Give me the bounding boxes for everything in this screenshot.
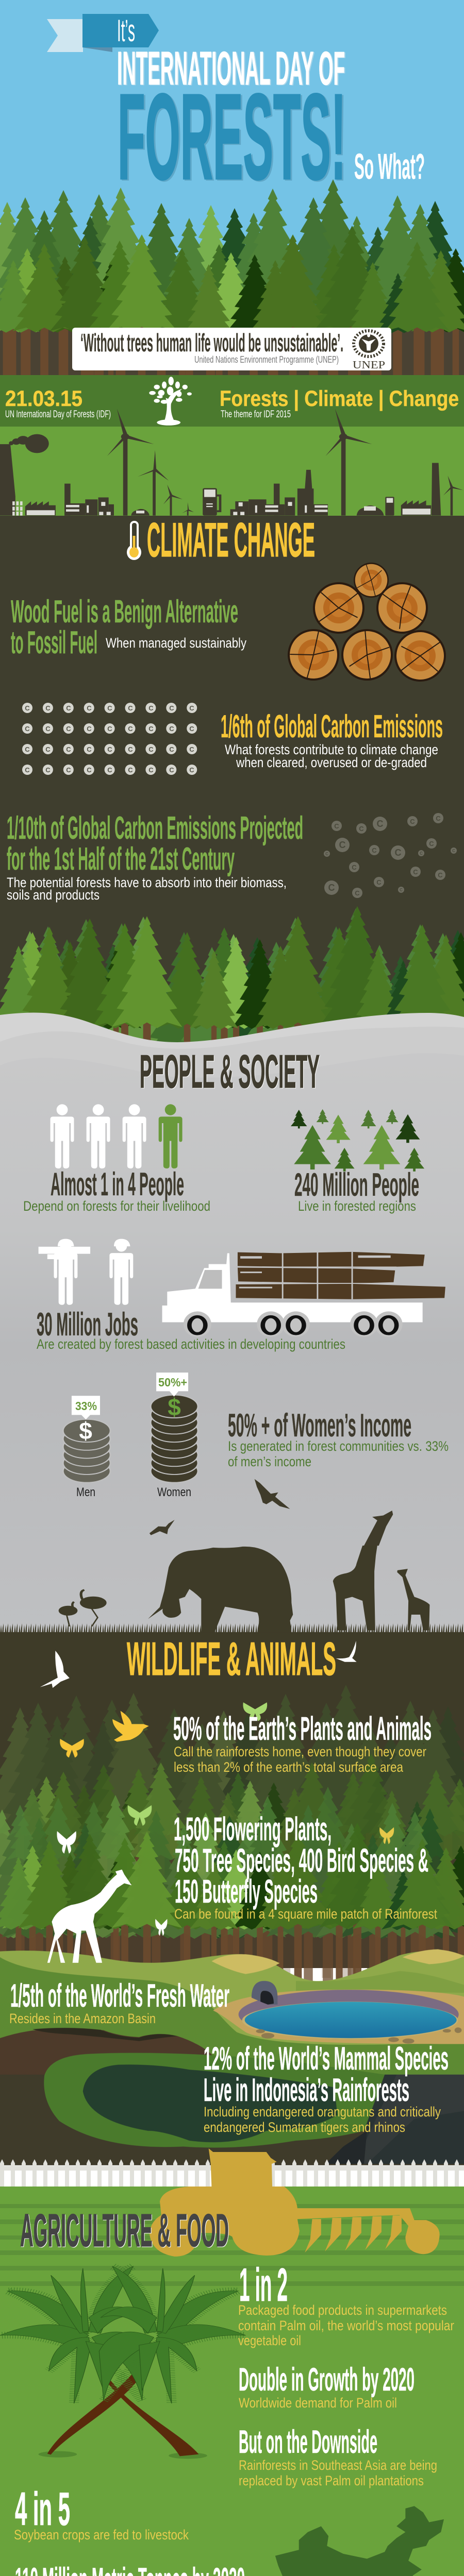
icon: UNEP logo: UNEP bbox=[353, 359, 385, 371]
icon: forestry workers bbox=[39, 1239, 133, 1305]
text: wood fuel: When managed sustainably bbox=[106, 635, 246, 651]
chart: income coin stacks: 33% bbox=[75, 1399, 97, 1413]
panel: agriculture field bbox=[0, 2187, 464, 2576]
text: 30 million jobs: Are created by forest based activities in developing countries bbox=[37, 1336, 345, 1352]
icon: birds and butterflies bbox=[40, 1641, 394, 1936]
panel: quote card: United Nations Environment Programme (UNEP) bbox=[194, 354, 339, 365]
heading: Climate Change bbox=[127, 513, 315, 567]
icon: stacked logs bbox=[278, 563, 453, 690]
text: one in four bbox=[23, 1166, 210, 1214]
text: 30 million jobs: 30 Million Jobs bbox=[37, 1307, 138, 1343]
panel: date and theme band bbox=[0, 375, 464, 427]
text: soybean stats: Soybean crops are fed to livestock bbox=[14, 2527, 189, 2543]
icon: scattered carbon coins: CCCCCCCCCCC bbox=[334, 815, 443, 897]
panel: climate section ground bbox=[0, 516, 464, 1031]
icon: scattered carbon coins: CCCC bbox=[328, 819, 401, 893]
text: wood fuel: to Fossil Fuel bbox=[11, 625, 97, 660]
panel: date and theme band: The theme for IDF 2015 bbox=[221, 409, 291, 420]
text: 240 million: Live in forested regions bbox=[298, 1198, 416, 1214]
text: one in four: Depend on forests for their livelihood bbox=[23, 1198, 210, 1214]
panel: forest floor bbox=[0, 278, 464, 376]
illustration: picket fence bbox=[0, 2159, 464, 2187]
text: one tenth of carbon: soils and products bbox=[7, 887, 100, 903]
icon: small tree cluster bbox=[291, 1109, 424, 1172]
panel: date and theme band: UN International Day of Forests (IDF) bbox=[5, 409, 111, 420]
ribbon: It's: It’s bbox=[117, 13, 135, 48]
icon: soaring birds bbox=[150, 1479, 393, 1546]
text: mammal species bbox=[204, 2041, 449, 2135]
forest: second tree line bbox=[0, 906, 464, 1219]
icon: white tree bbox=[149, 377, 192, 426]
text: 30 million jobs bbox=[37, 1307, 345, 1352]
panel: quote card bbox=[72, 328, 391, 371]
text: one sixth of carbon bbox=[221, 709, 443, 770]
text: soybean stats bbox=[14, 2483, 421, 2576]
panel: date and theme band: 21.03.15 bbox=[5, 386, 82, 411]
panel: people and society snow hills bbox=[0, 1013, 464, 1638]
text: fresh water: Resides in the Amazon Basin bbox=[9, 2011, 156, 2026]
illustration: savannah animals bbox=[59, 1546, 429, 1632]
chart: income coin stacks: $ bbox=[168, 1394, 181, 1420]
icon: four people bbox=[51, 1104, 183, 1168]
text: soybean stats: 4 in 5 bbox=[15, 2483, 70, 2535]
text: palm oil stats bbox=[238, 2259, 454, 2488]
panel: wildlife section ground bbox=[0, 1632, 464, 1967]
text: 240 million bbox=[294, 1167, 419, 1214]
chart: income coin stacks bbox=[63, 1372, 198, 1499]
text: one sixth of carbon: when cleared, overused or de-graded bbox=[236, 755, 427, 770]
icon: logging truck bbox=[162, 1252, 445, 1337]
text: women's income: of men’s income bbox=[228, 1454, 311, 1469]
text: one in four: Almost 1 in 4 People bbox=[51, 1166, 184, 1202]
chart: income coin stacks: Women bbox=[157, 1485, 191, 1499]
text: palm oil stats: Worldwide demand for Palm oil bbox=[239, 2395, 397, 2411]
text: palm oil stats: vegetable oil bbox=[238, 2333, 301, 2348]
chart: carbon coin grid, 36 of 216 bbox=[25, 704, 198, 774]
icon: UNEP logo bbox=[353, 331, 385, 371]
icon: map of China bbox=[275, 2506, 444, 2576]
icon: scattered carbon coins: CCCC bbox=[325, 849, 455, 892]
icon: thermometer bbox=[127, 521, 141, 560]
icon: white giraffe bbox=[47, 1870, 131, 1963]
chart: income coin stacks: $ bbox=[79, 1417, 92, 1444]
text: flowering plants bbox=[174, 1810, 437, 1922]
illustration: industry and wind turbine skyline bbox=[0, 409, 463, 516]
text: mammal species: endangered Sumatran tigers and rhinos bbox=[204, 2120, 405, 2135]
forest: top tree line bbox=[0, 179, 464, 490]
text: palm oil stats: 1 in 2 bbox=[239, 2259, 288, 2311]
chart: carbon coin grid, 36 of 216: CCCCCCCCC bbox=[25, 704, 194, 712]
ribbon: It's bbox=[47, 13, 159, 52]
chart: income coin stacks: Men bbox=[76, 1485, 95, 1499]
text: palm oil stats: replaced by vast Palm oil plantations bbox=[239, 2473, 424, 2488]
panel: bright green skyline sky bbox=[0, 427, 464, 516]
chart: carbon coin grid, 36 of 216: CCCCCCCCC bbox=[25, 745, 194, 753]
text: one tenth of carbon: The potential forests have to absorb into their biomass, bbox=[7, 875, 287, 890]
panel: green hills and pond bbox=[0, 1950, 464, 2165]
illustration: cliff bbox=[0, 2029, 237, 2075]
illustration: palm trees bbox=[0, 2266, 245, 2459]
illustration: grass edge bbox=[0, 1623, 464, 1634]
text: one tenth of carbon bbox=[7, 810, 303, 903]
chart: carbon coin grid, 36 of 216: CCCCCCCCC bbox=[25, 725, 194, 733]
text: fresh water bbox=[9, 1978, 229, 2026]
chart: carbon coin grid, 36 of 216: CCCCCCCCC bbox=[25, 766, 194, 774]
illustration: field furrows bbox=[0, 2204, 464, 2286]
panel: sky background bbox=[0, 0, 464, 278]
chart: income coin stacks: 50%+ bbox=[158, 1376, 187, 1389]
illustration: pond bbox=[213, 1981, 464, 2044]
icon: tractor bbox=[150, 2148, 440, 2257]
text: plants and animals bbox=[173, 1710, 432, 1775]
text: women's income bbox=[228, 1408, 449, 1469]
text: wood fuel bbox=[11, 594, 246, 660]
forest: wildlife tree line bbox=[0, 1685, 464, 2098]
illustration: jungle clearing bbox=[44, 2053, 385, 2148]
text: plants and animals: less than 2% of the earth’s total surface area bbox=[174, 1759, 404, 1775]
